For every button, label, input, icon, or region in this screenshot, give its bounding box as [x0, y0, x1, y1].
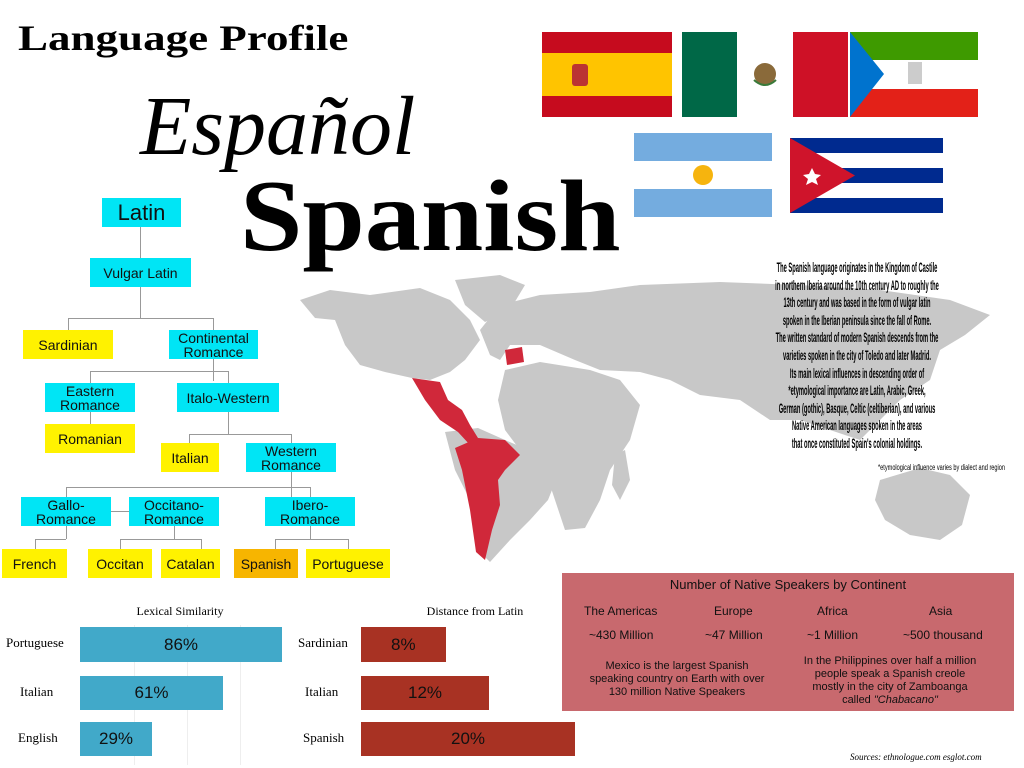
chart: lexical similarity [6, 604, 282, 765]
tree node: Spanish [234, 549, 298, 578]
tree node: Occitano-Romance: Occitano- [144, 496, 204, 512]
tree node: Ibero-Romance: Ibero- [292, 496, 328, 512]
tree node: Italo-Western [177, 383, 279, 412]
chart: lexical similarity: 86% [164, 634, 198, 654]
tree node: Romanian [45, 424, 135, 453]
tree node: Italo-Western: Italo-Western [186, 390, 270, 406]
text block: history: German (gothic), Basque, Celtic (celtiberian), and various [779, 400, 935, 416]
tree node: Ibero-Romance [265, 497, 355, 526]
text block: history: 13th century and was based in the form of vulgar latin [783, 294, 931, 310]
chart: distance from Latin: Italian [305, 684, 338, 699]
chart: lexical similarity: 29% [99, 729, 133, 748]
panel: native speakers: Number of Native Speakers by Continent [670, 577, 906, 592]
heading: Español: Español [140, 80, 415, 173]
chart: lexical similarity: Portuguese [6, 635, 64, 650]
tree node: Vulgar Latin [90, 258, 191, 287]
flag: Equatorial Guinea [850, 32, 978, 117]
tree node: Latin [102, 198, 181, 227]
tree node: Occitano-Romance: Romance [144, 510, 204, 526]
tree node: Gallo-Romance [21, 497, 111, 526]
chart: distance from Latin: Sardinian [298, 635, 348, 650]
flag: Mexico [682, 32, 848, 117]
tree node: Portuguese: Portuguese [312, 556, 384, 572]
title: Language Profile [18, 18, 348, 58]
heading: Spanish: Spanish [240, 160, 621, 273]
panel: native speakers: The Americas [584, 604, 657, 618]
text block: history: spoken in the Iberian peninsula since the fall of Rome. [783, 312, 931, 328]
text block: history: The written standard of modern Spanish descends from the [776, 329, 938, 345]
text block: history: that once constituted Spain's colonial holdings. [792, 435, 922, 451]
tree node: Continental Romance: Continental [178, 330, 249, 346]
panel: native speakers: Mexico is the largest Spanish speaking country on Earth with over 130 million Native Speakers [590, 660, 764, 698]
sources: Sources: ethnologue.com esglot.com [850, 752, 982, 762]
panel: native speakers: Asia [929, 604, 952, 618]
text block: history: in northern Iberia around the 10th century AD to roughly the [775, 277, 939, 293]
chart: distance from Latin: 8% [391, 634, 416, 654]
tree node: Ibero-Romance: Romance [280, 510, 340, 526]
panel: native speakers: ~1 Million [807, 628, 858, 642]
chart: lexical similarity: Italian [20, 684, 53, 699]
tree node: Italian: Italian [171, 450, 209, 466]
tree node: French [2, 549, 67, 578]
tree node: Italian [161, 443, 219, 472]
tree node: Occitan [88, 549, 152, 578]
tree node: Sardinian [23, 330, 113, 359]
tree node: Portuguese [306, 549, 390, 578]
panel: native speakers: ~430 Million [589, 628, 653, 642]
text block: history: Native American languages spoken in the areas [792, 417, 922, 433]
tree node: Catalan: Catalan [166, 556, 215, 572]
tree node: Romanian: Romanian [58, 430, 122, 446]
chart: distance from Latin [298, 604, 575, 756]
text block: history: varieties spoken in the city of Toledo and later Madrid. [783, 347, 931, 363]
chart: distance from Latin: 20% [451, 729, 485, 748]
text block: history [775, 259, 939, 451]
tree node: Vulgar Latin: Vulgar Latin [103, 264, 178, 280]
tree node: Eastern Romance: Eastern [66, 382, 114, 398]
flag: Spain [542, 32, 672, 117]
flags [542, 32, 978, 217]
tree node: Sardinian: Sardinian [38, 336, 98, 352]
panel: native speakers: In the Philippines over half a million people speak a Spanish creole mostly in the city of Zamboanga called "Chabacano" [804, 655, 976, 706]
panel: native speakers: ~47 Million [705, 628, 763, 642]
chart: distance from Latin: 12% [408, 683, 442, 702]
chart: lexical similarity: Lexical Similarity [136, 604, 223, 618]
tree node: Occitan: Occitan [96, 556, 144, 572]
chart: distance from Latin: Spanish [303, 730, 344, 745]
tree node: Continental Romance: Romance [184, 344, 243, 360]
tree node: Catalan [161, 549, 220, 578]
tree node: Eastern Romance: Romance [60, 396, 120, 412]
tree node: Eastern Romance [45, 383, 135, 412]
chart: lexical similarity: English [18, 730, 58, 745]
flag: Argentina [634, 133, 772, 217]
panel: native speakers: ~500 thousand [903, 628, 983, 642]
text block: history: *etymological importance are Latin, Arabic, Greek, [788, 382, 926, 398]
tree node: Western Romance [246, 443, 336, 472]
panel: native speakers: Africa [817, 604, 848, 618]
tree node: Gallo-Romance: Gallo- [47, 496, 85, 512]
tree node: Latin: Latin [118, 200, 165, 224]
tree node: Occitano-Romance [129, 497, 219, 526]
footnote: *etymological influence varies by dialect and region [878, 463, 1005, 472]
flag: Cuba [790, 138, 943, 213]
tree node: Western Romance: Western [265, 442, 317, 458]
family tree [35, 227, 349, 549]
chart: lexical similarity: 61% [134, 683, 169, 702]
tree node: Continental Romance [169, 330, 258, 359]
tree node: Western Romance: Romance [261, 456, 321, 472]
panel: native speakers: Europe [714, 604, 753, 618]
tree node: Spanish: Spanish [241, 556, 291, 572]
text block: history: Its main lexical influences in descending order of [790, 365, 924, 381]
panel: native speakers [562, 573, 1014, 711]
tree node: French: French [13, 556, 56, 572]
tree node: Gallo-Romance: Romance [36, 510, 96, 526]
text block: history: The Spanish language originates in the Kingdom of Castile [777, 259, 937, 275]
chart: distance from Latin: Distance from Latin [427, 604, 523, 618]
